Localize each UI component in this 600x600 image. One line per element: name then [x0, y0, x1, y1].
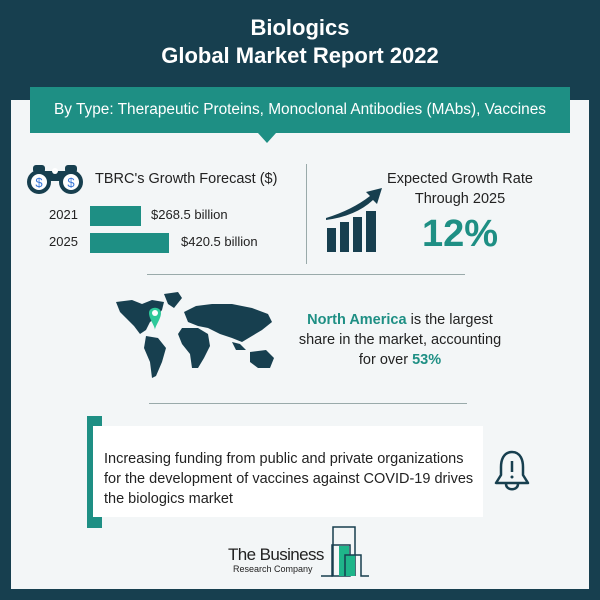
bar chart: forecast: 2021: [49, 207, 78, 222]
icon: binoculars: $: [67, 175, 75, 190]
logo: the business research company: The Business: [228, 545, 324, 564]
text: north america: North America is the largest share in the market, accounting for over 53%: [299, 312, 501, 368]
bar chart: forecast: [49, 206, 258, 253]
callout: driver: [87, 416, 483, 528]
icon: world map: [116, 292, 274, 378]
bar chart: forecast: $268.5 billion: [151, 207, 228, 222]
title: [161, 15, 439, 68]
panel: main light background: [11, 100, 589, 589]
divider: [306, 164, 307, 264]
banner: by type: By Type: Therapeutic Proteins, Monoclonal Antibodies (MAbs), Vaccines: [54, 101, 546, 118]
text: expected growth rate: [387, 171, 533, 207]
banner: by type: [30, 87, 570, 133]
text: expected growth rate: Expected Growth Rate: [387, 171, 533, 187]
divider: [147, 274, 465, 275]
title: Global Market Report 2022: [161, 43, 439, 68]
callout: driver: Increasing funding from public and private organizations for the development of vaccines against COVID-19 drives the biologics market: [104, 451, 473, 507]
logo: the business research company: [228, 526, 369, 577]
bar chart: forecast: 2025: [49, 234, 78, 249]
bar chart: forecast: $420.5 billion: [181, 234, 258, 249]
logo: the business research company: Research Company: [233, 564, 313, 574]
icon: binoculars: [27, 165, 83, 194]
icon: binoculars: $: [35, 175, 43, 190]
title: Biologics: [250, 15, 350, 40]
heading: growth forecast: TBRC's Growth Forecast ($): [95, 171, 277, 187]
banner pointer: [258, 133, 276, 143]
icon: growth chart: [326, 188, 382, 252]
icon: bell alert: [494, 450, 530, 490]
stat: 12%: 12%: [422, 213, 498, 255]
divider: [149, 403, 467, 404]
text: expected growth rate: Through 2025: [415, 191, 505, 207]
